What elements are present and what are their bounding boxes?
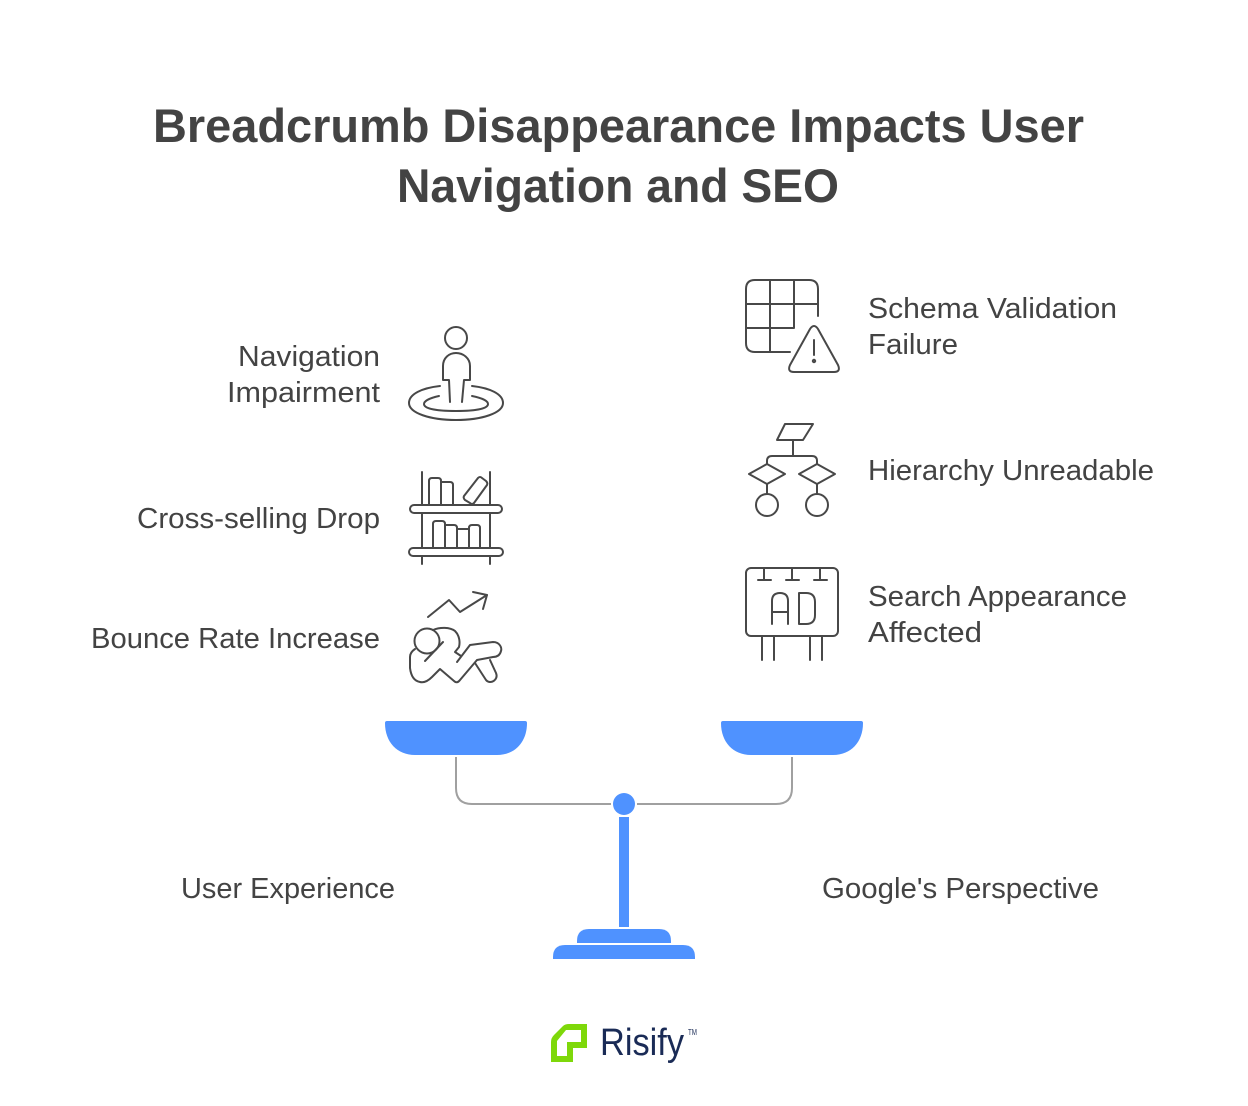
logo: Risify: Risify [600,1022,684,1064]
icon: flowchart [749,424,835,516]
label: Navigation Impairment [227,341,380,409]
beam [456,757,792,804]
label: Bounce Rate Increase: Bounce Rate Increase [91,623,380,655]
label: Navigation Impairment: Impairment [227,377,380,409]
label: Search Appearance Affected [868,581,1127,649]
lower base [553,945,695,959]
logo: Risify [551,1022,697,1064]
label: Cross-selling Drop: Cross-selling Drop [137,503,380,535]
pivot [613,793,635,815]
pole [619,817,629,927]
left pan [385,721,527,755]
title [153,99,1084,212]
title: Navigation and SEO [397,159,839,212]
label: Search Appearance Affected: Affected [868,617,982,649]
label: Schema Validation Failure: Failure [868,329,958,361]
label: User Experience: User Experience [181,873,395,905]
icon: bookshelf [409,472,503,564]
label: Navigation Impairment: Navigation [238,341,380,373]
label: Search Appearance Affected: Search Appearance [868,581,1127,613]
title: Breadcrumb Disappearance Impacts User [153,99,1084,152]
label: Schema Validation Failure: Schema Validation [868,293,1117,325]
label: Google's Perspective: Google's Perspective [822,873,1099,905]
icon: person in ring [409,327,503,420]
icon: grid with warning triangle [746,280,839,372]
right pan [721,721,863,755]
logo: Risify: TM [688,1028,697,1037]
label: Schema Validation Failure [868,293,1117,361]
icon: trend arrow and slumped person [410,592,501,682]
upper base [577,929,671,943]
balance scale [385,721,863,959]
label: Hierarchy Unreadable: Hierarchy Unreadable [868,455,1154,487]
icon: AD billboard [746,568,838,660]
